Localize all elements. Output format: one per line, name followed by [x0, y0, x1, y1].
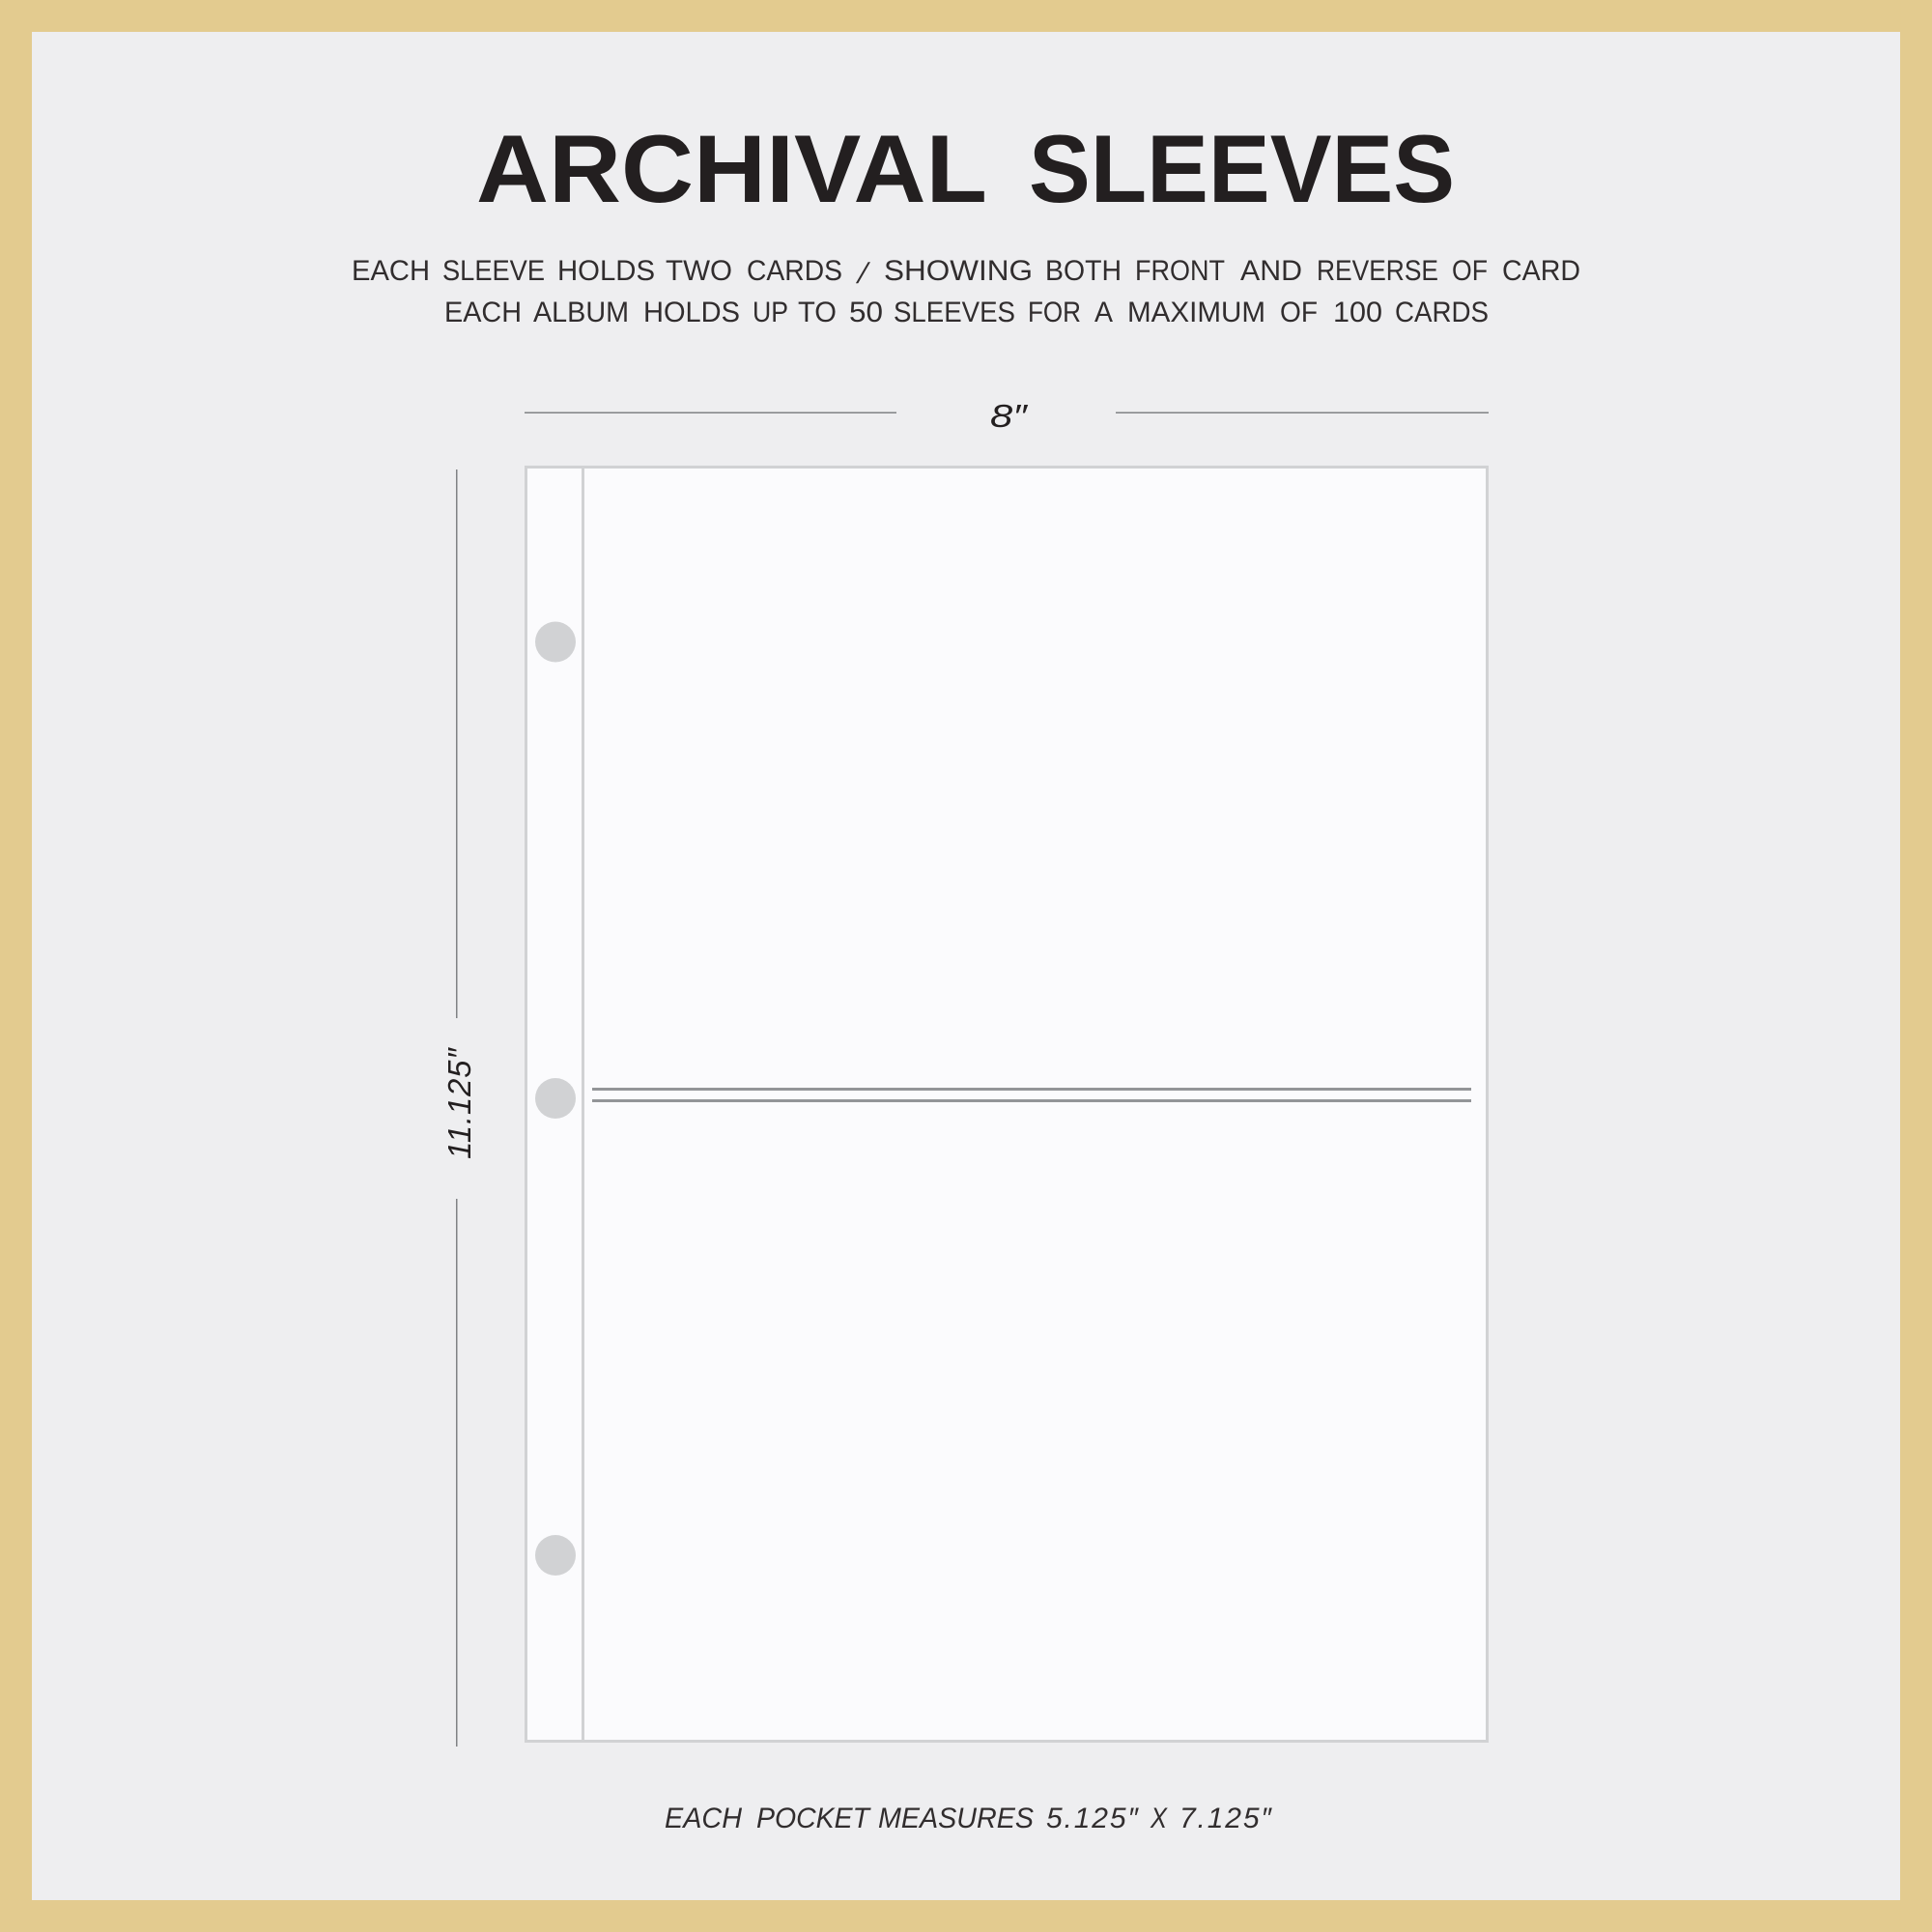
title: ARCHIVAL: [476, 115, 987, 222]
archival sleeve sheet: [526, 468, 1488, 1741]
height dimension: 11.125 inches: 11.125″: [441, 1047, 477, 1159]
subtitle text block: EACH: [352, 255, 430, 287]
subtitle text block: REVERSE: [1317, 255, 1438, 287]
pocket divider lines: [592, 1088, 1471, 1102]
subtitle text block: [352, 255, 1580, 328]
subtitle text block: 50: [849, 297, 883, 328]
subtitle text block: SHOWING: [884, 255, 1033, 287]
subtitle text block: BOTH: [1045, 255, 1122, 287]
subtitle text block: FOR: [1028, 297, 1081, 328]
subtitle text block: A: [1094, 297, 1113, 328]
subtitle text block: UP: [753, 297, 788, 328]
subtitle text block: SLEEVES: [894, 297, 1015, 328]
pocket size caption: [665, 1803, 1272, 1834]
subtitle text block: HOLDS: [557, 255, 655, 287]
subtitle text block: SLEEVE: [442, 255, 545, 287]
subtitle text block: TWO: [666, 255, 732, 287]
subtitle text block: HOLDS: [643, 297, 740, 328]
subtitle text block: TO: [798, 297, 837, 328]
subtitle text block: 100: [1333, 297, 1382, 328]
pocket size caption: 5.125″: [1046, 1803, 1139, 1834]
punch hole: bottom: [535, 1535, 576, 1576]
subtitle text block: OF: [1280, 297, 1318, 328]
subtitle text block: OF: [1452, 255, 1488, 287]
subtitle text block: MAXIMUM: [1127, 297, 1265, 328]
punch hole: middle: [535, 1078, 576, 1119]
pocket size caption: 7.125″: [1179, 1803, 1272, 1834]
pocket size caption: POCKET: [756, 1803, 872, 1834]
subtitle text block: AND: [1240, 255, 1302, 287]
title: [476, 115, 1455, 222]
subtitle text block: CARD: [1502, 255, 1580, 287]
binding strip divider: [582, 469, 584, 1741]
punch hole: top: [535, 622, 576, 663]
subtitle text block: EACH: [444, 297, 522, 328]
width dimension: 8 inches: 8″: [990, 398, 1029, 434]
subtitle text block: CARDS: [747, 255, 842, 287]
sleeve outline: [526, 468, 1488, 1741]
title: SLEEVES: [1029, 115, 1455, 222]
pocket size caption: EACH: [665, 1803, 742, 1834]
pocket size caption: X: [1150, 1803, 1168, 1834]
subtitle text block: ALBUM: [533, 297, 629, 328]
pocket size caption: MEASURES: [878, 1803, 1034, 1834]
subtitle text block: /: [854, 257, 872, 290]
subtitle text block: CARDS: [1395, 297, 1489, 328]
subtitle text block: FRONT: [1135, 255, 1225, 287]
